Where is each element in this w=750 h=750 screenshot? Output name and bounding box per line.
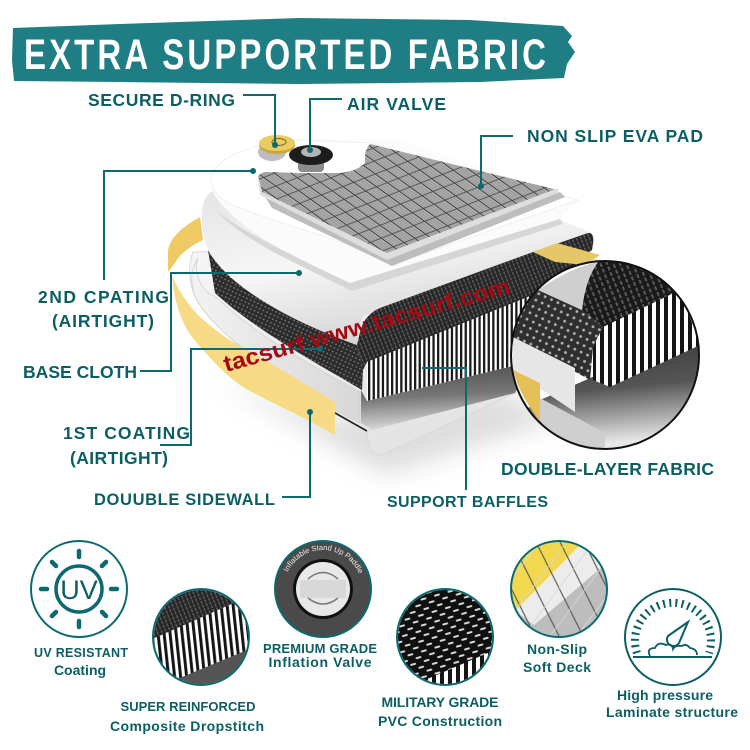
feature: high pressure laminate: High pressure xyxy=(617,687,713,703)
label: non slip eva pad: NON SLIP EVA PAD xyxy=(527,126,703,146)
feature: soft deck: Soft Deck xyxy=(523,659,591,675)
yellow sidewall strip xyxy=(172,275,335,435)
feature: inflation valve: Inflation Valve xyxy=(268,654,372,670)
top carbon fabric xyxy=(357,233,593,370)
white base cloth layer xyxy=(202,188,592,345)
eva pad shadow xyxy=(262,192,565,266)
floor under baffles xyxy=(361,362,530,430)
feature: pvc construction: MILITARY GRADE xyxy=(382,694,498,710)
air valve xyxy=(289,145,333,172)
watermark: tacsurf www.tacsurf.com xyxy=(220,273,513,377)
sheet shade xyxy=(214,208,563,291)
eva pad xyxy=(258,144,558,255)
d-ring xyxy=(258,135,295,161)
top disc xyxy=(211,140,578,262)
yellow strip right xyxy=(533,243,600,265)
feature: pvc construction xyxy=(378,588,502,729)
feature: inflation valve xyxy=(263,540,377,670)
feature: high pressure laminate xyxy=(606,589,738,720)
callout labels xyxy=(23,90,714,511)
label: airtight 1: (AIRTIGHT) xyxy=(52,311,154,331)
support baffles xyxy=(367,296,530,401)
white side wall xyxy=(192,258,360,423)
label: support baffles: SUPPORT BAFFLES xyxy=(387,494,548,511)
second coating sheet xyxy=(211,139,578,283)
dark seam xyxy=(335,413,367,431)
yellow sidewall strip top xyxy=(168,217,203,272)
title banner xyxy=(12,18,575,84)
magnifier xyxy=(510,261,700,450)
feature: uv resistant: UV RESISTANT xyxy=(34,646,128,660)
label: secure d-ring: SECURE D-RING xyxy=(88,90,235,110)
eva pad edge xyxy=(258,178,558,260)
label: double-layer fabric: DOUBLE-LAYER FABRIC xyxy=(501,459,714,479)
feature: soft deck xyxy=(510,540,610,675)
feature: composite dropstitch: SUPER REINFORCED xyxy=(120,699,256,714)
feature: uv resistant xyxy=(31,541,128,678)
feature: inflation valve: Inflatable Stand Up Paddle Board xyxy=(284,545,362,574)
label: airtight 2: (AIRTIGHT) xyxy=(70,448,168,468)
lower white shell xyxy=(190,250,600,455)
label: base cloth: BASE CLOTH xyxy=(23,362,137,382)
feature: composite dropstitch xyxy=(110,585,264,734)
feature: uv resistant: Coating xyxy=(54,662,106,678)
title: EXTRA SUPPORTED FABRIC xyxy=(24,32,546,79)
leader lines xyxy=(104,95,513,497)
label: 1st coating: 1ST COATING xyxy=(63,423,190,443)
label: 2nd coating: 2ND CPATING xyxy=(38,287,169,307)
board exploded diagram xyxy=(168,135,700,475)
side mesh fabric xyxy=(208,250,363,390)
label: double sidewall: DOUUBLE SIDEWALL xyxy=(94,491,275,509)
feature: soft deck: Non-Slip xyxy=(527,641,587,657)
feature: composite dropstitch: Composite Dropstitch xyxy=(110,718,264,734)
feature: high pressure laminate: Laminate structure xyxy=(606,704,738,720)
feature: inflation valve: PREMIUM GRADE xyxy=(263,641,377,656)
feature: pvc construction: PVC Construction xyxy=(378,713,502,729)
feature: uv resistant: UV xyxy=(60,575,98,605)
label: air valve: AIR VALVE xyxy=(347,94,446,114)
